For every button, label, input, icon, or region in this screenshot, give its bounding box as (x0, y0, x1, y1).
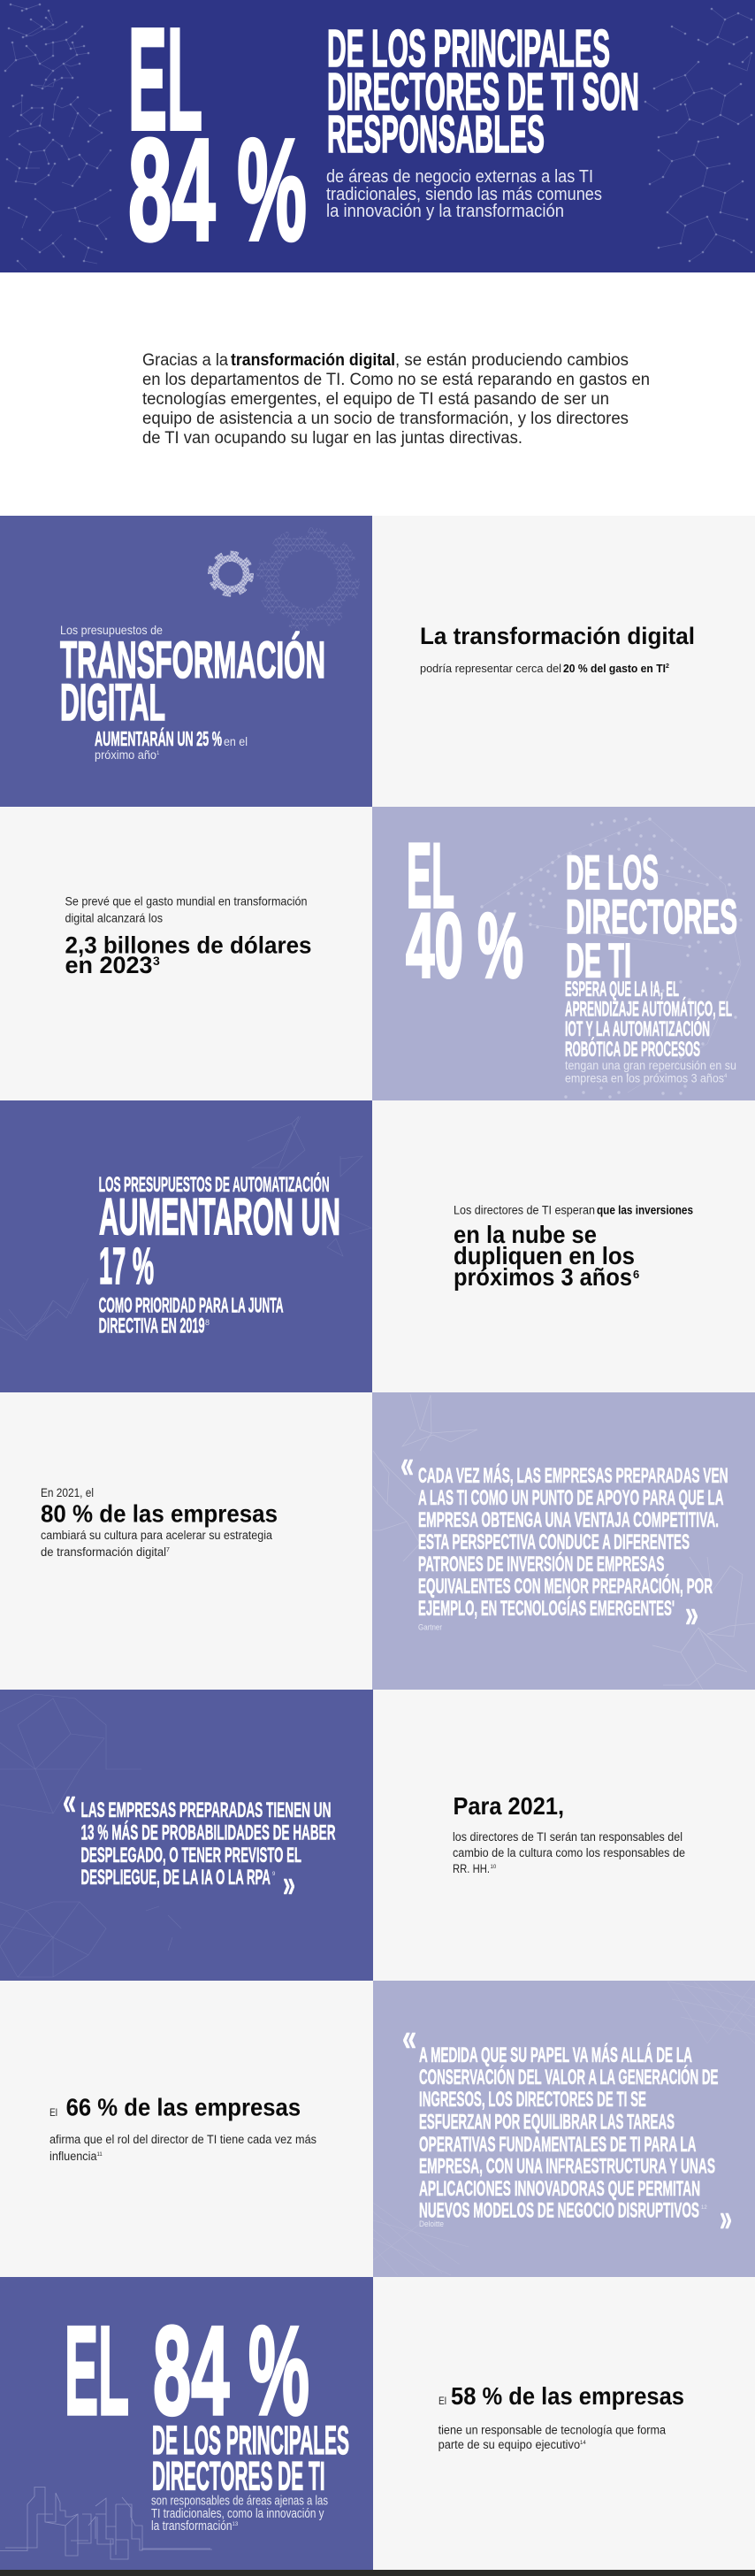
text block: RR. HH. (453, 1862, 490, 1875)
body text (151, 2493, 328, 2534)
text block (454, 1203, 693, 1291)
heading (152, 2418, 349, 2498)
quote text: 9 (272, 1872, 276, 1877)
text block: LOS PRESUPUESTOS DE AUTOMATIZACIÓN (99, 1172, 330, 1197)
text block (420, 623, 695, 675)
hero heading (327, 19, 639, 164)
text block: 2 (666, 663, 669, 670)
text block: los directores de TI serán tan responsables del (453, 1830, 683, 1844)
panel: cita de Gartner (372, 1392, 755, 1690)
panel: hero banner (0, 0, 755, 272)
text block: AUMENTARON UN (99, 1189, 340, 1246)
panel: 66 % de las empresas (0, 1981, 373, 2277)
text block (65, 893, 311, 978)
quote text: « (63, 1780, 76, 1823)
text block: 17 % (99, 1238, 154, 1295)
hero subtitle: tradicionales, siendo las más comunes (326, 185, 602, 204)
text block: Para 2021, (453, 1792, 564, 1820)
quote text: 13 % MÁS DE PROBABILIDADES DE HABER (81, 1821, 336, 1845)
stat: EL 84 %: 84 % (153, 2301, 309, 2442)
text block: 7 (166, 1547, 170, 1553)
text block: 2,3 billones de dólares (65, 932, 311, 959)
panel: Para 2021 (373, 1690, 755, 1981)
text block: influencia (50, 2150, 97, 2163)
text block: podría representar cerca del (420, 662, 561, 675)
body text: empresa en los próximos 3 años (565, 1070, 724, 1085)
body text: 13 (232, 2522, 239, 2527)
text block (99, 1172, 340, 1338)
hero heading: RESPONSABLES (327, 105, 545, 164)
text block: 66 % de las empresas (66, 2093, 301, 2121)
text block: 3 (153, 954, 160, 968)
intro paragraph: de TI van ocupando su lugar en las juntas directivas. (142, 429, 522, 448)
stat: EL 40 % (406, 824, 523, 998)
text block: afirma que el rol del director de TI tiene cada vez más (50, 2133, 316, 2146)
text block: 11 (97, 2152, 103, 2158)
text block: 6 (633, 1268, 639, 1281)
panel: 40 % de los directores de TI (372, 807, 755, 1100)
hero subtitle: la innovación y la transformación (326, 202, 564, 221)
text block: TRANSFORMACIÓN (60, 632, 325, 689)
body text: son responsables de áreas ajenas a las (151, 2493, 328, 2509)
body text: TI tradicionales, como la innovación y (151, 2506, 324, 2521)
stat: EL 40 %: EL (407, 824, 454, 927)
hero subtitle: de áreas de negocio externas a las TI (326, 167, 593, 187)
intro paragraph: transformación digital (231, 351, 395, 370)
text block: AUMENTARÁN UN 25 % (95, 726, 222, 750)
heading: DE LOS (566, 845, 659, 900)
panel: cita de Deloitte (373, 1981, 755, 2277)
text block: El (50, 2106, 57, 2119)
hero stat: EL 84 %: 84 % (128, 109, 307, 271)
hero stat: EL 84 % (128, 0, 307, 271)
panel: inversiones en la nube (372, 1100, 755, 1392)
stat: EL 84 % (65, 2301, 309, 2442)
quote text: Gartner (418, 1622, 442, 1631)
heading: DIRECTORES DE TI (152, 2454, 325, 2498)
intro paragraph: tecnologías emergentes, el equipo de TI está pasando de ser un (142, 390, 609, 409)
text block: en 2023 (65, 952, 152, 978)
text block: Se prevé que el gasto mundial en transformación (65, 893, 308, 908)
faint line chart pattern (0, 1116, 371, 1340)
panel: empresas preparadas (0, 1690, 373, 1981)
text block: de transformación digital (41, 1545, 166, 1559)
body text (565, 978, 736, 1085)
text block: 8 (205, 1318, 210, 1327)
network pattern (373, 1394, 755, 1690)
body text: 4 (724, 1074, 728, 1079)
text block: próximo año (95, 748, 156, 762)
text block: DIRECTIVA EN 2019 (99, 1315, 205, 1338)
panel: 84 % de los principales directores (0, 2277, 373, 2570)
quote text: LAS EMPRESAS PREPARADAS TIENEN UN (81, 1798, 331, 1822)
mesh pattern (0, 1694, 181, 1977)
mesh pattern (373, 1982, 755, 2275)
text block: La transformación digital (420, 623, 695, 649)
stat: EL 40 %: 40 % (406, 895, 523, 998)
hero stat: EL 84 %: EL (128, 0, 202, 160)
quote text: 12 (701, 2205, 707, 2211)
hero network pattern right (645, 9, 751, 261)
text block: 80 % de las empresas (41, 1500, 278, 1527)
text block: tiene un responsable de tecnología que forma (439, 2424, 667, 2436)
quote text: DESPLEGADO, O TENER PREVISTO EL (81, 1844, 301, 1867)
text block: En 2021, el (41, 1486, 94, 1499)
text block: 58 % de las empresas (451, 2382, 684, 2410)
text block (41, 1486, 278, 1559)
text block: digital alcanzará los (65, 911, 163, 925)
text block (60, 623, 325, 762)
icon: gears (210, 531, 355, 626)
body text: la transformación (151, 2518, 232, 2534)
footer bar (0, 2570, 755, 2576)
body text: tengan una gran repercusión en su (565, 1058, 736, 1072)
quote text (400, 1443, 728, 1636)
text block: Los presupuestos de (60, 623, 163, 637)
stat: EL 84 %: EL (65, 2301, 129, 2442)
text block: 1 (156, 751, 160, 756)
quote text (402, 2016, 732, 2240)
hero subtitle (326, 167, 602, 221)
globe of dots (482, 819, 741, 1097)
text block: parte de su equipo ejecutivo (439, 2438, 580, 2451)
intro paragraph (142, 351, 650, 448)
text block: que las inversiones (597, 1203, 693, 1217)
panel: 58 % de las empresas (373, 2277, 755, 2571)
quote text: » (685, 1592, 698, 1636)
text block (439, 2382, 684, 2451)
panel: 80 % de las empresas (0, 1392, 372, 1690)
text block: 10 (490, 1865, 497, 1870)
panel: presupuestos de automatización (0, 1100, 372, 1392)
text block: cambiará su cultura para acelerar su estrategia (41, 1529, 272, 1542)
quote text (63, 1780, 336, 1905)
text block: próximos 3 años (454, 1263, 632, 1291)
quote text: Deloitte (419, 2220, 444, 2228)
hero network pattern left (5, 4, 111, 270)
city skyline outline (0, 2488, 212, 2559)
text block: 14 (580, 2441, 586, 2446)
text block: en la nube se (454, 1221, 597, 1248)
heading (566, 845, 737, 987)
heading: DE TI (566, 932, 631, 987)
intro paragraph: equipo de asistencia a un socio de transformación, y los directores (142, 410, 629, 428)
intro paragraph: Gracias a la (142, 351, 228, 370)
text block: 20 % del gasto en TI (563, 662, 666, 675)
panel: 84 % de los principales directores: DE LOS PRINCIPALES (152, 2418, 349, 2463)
quote text: DESPLIEGUE, DE LA IA O LA RPA (81, 1866, 271, 1890)
panel: 20 % del gasto en TI (372, 516, 755, 807)
intro paragraph: en los departamentos de TI. Como no se está reparando en gastos en (142, 371, 650, 389)
text block: DIGITAL (60, 674, 165, 732)
text block: Los directores de TI esperan (454, 1203, 595, 1217)
text block (50, 2093, 316, 2163)
quote text: « (402, 2016, 416, 2059)
quote text: » (283, 1862, 295, 1905)
text block: El (439, 2395, 446, 2407)
text block: en el (224, 734, 248, 748)
quote text: « (400, 1443, 414, 1486)
intro paragraph: , se están produciendo cambios (395, 351, 629, 370)
text block: cambio de la cultura como los responsables de (453, 1846, 685, 1859)
panel: gasto mundial (0, 807, 372, 1100)
text block: dupliquen en los (454, 1242, 635, 1269)
text block (453, 1792, 685, 1875)
panel: presupuestos de transformación digital (0, 516, 372, 807)
text block: COMO PRIORIDAD PARA LA JUNTA (99, 1293, 284, 1318)
quote text: » (720, 2196, 732, 2240)
